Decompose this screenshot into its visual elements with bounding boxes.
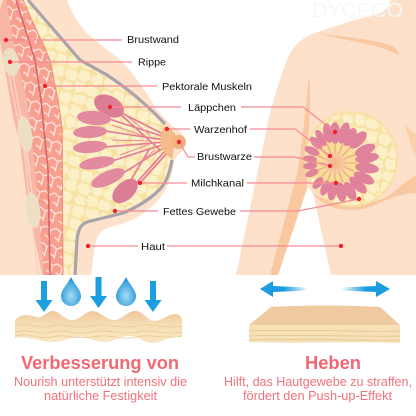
heading: lift: Heben: [305, 353, 361, 373]
fat circle: [305, 112, 397, 206]
breast crescent shadow: [312, 176, 416, 210]
milk ducts: [106, 113, 167, 184]
icon: drop: [61, 277, 81, 306]
anatomy labels: Fettes Gewebe: [163, 206, 236, 218]
callout dots: [4, 38, 361, 248]
icon: right arrow: [341, 281, 390, 297]
icon: firming arrows and drops: [36, 277, 162, 312]
icon: left arrow: [260, 281, 308, 297]
side contour: [405, 125, 416, 155]
panel: breast cross-section: [0, 0, 186, 275]
areola: [323, 151, 347, 175]
watermark: DYCECO: [312, 0, 403, 22]
anatomy labels: Brustwarze: [197, 151, 252, 163]
areola and nipple: [161, 126, 176, 160]
anatomy labels: Pektorale Muskeln: [162, 81, 252, 93]
collar shadow: [318, 33, 399, 55]
text: lift description: Hilft, das Hautgewebe zu straffen,: [224, 375, 412, 389]
anatomy labels: [127, 34, 252, 253]
grey membrane: [28, 0, 172, 275]
duct disc: [312, 140, 358, 186]
icon: arrow: [36, 281, 52, 312]
red divider: [16, 0, 50, 275]
skin: [0, 0, 186, 275]
inner arm shadow: [270, 75, 310, 275]
muscle fibres: [8, 70, 38, 275]
gland petals: [303, 121, 380, 203]
panel: front torso: [236, 0, 416, 275]
flat skin block: [249, 306, 400, 343]
callout lines: [6, 40, 359, 246]
text: firming description: [14, 375, 187, 403]
heading: firming: Verbesserung von: [21, 353, 179, 373]
text: firming description: natürliche Festigkeit: [44, 389, 158, 403]
text: lift description: fördert den Push-up-Effekt: [243, 389, 393, 403]
body: [236, 0, 416, 275]
anatomy labels: Brustwand: [127, 34, 179, 46]
anatomy labels: Haut: [141, 241, 165, 253]
pectoral muscle: [0, 0, 63, 275]
wavy skin layers: [15, 311, 182, 343]
anatomy labels: Rippe: [138, 56, 166, 68]
rib band inner: [17, 0, 63, 275]
text: firming description: Nourish unterstützt intensiv die: [14, 375, 187, 389]
icon: arrow: [90, 277, 107, 308]
lobules: [73, 94, 138, 204]
inner edge: [23, 0, 63, 275]
icon: drop: [116, 277, 136, 306]
anatomy labels: Milchkanal: [191, 178, 244, 190]
anatomy labels: Warzenhof: [194, 124, 247, 136]
text: lift description: [224, 375, 412, 403]
icon: arrow: [144, 281, 162, 312]
fat tissue: [23, 0, 172, 275]
rib band outer: [6, 0, 50, 275]
chest wall ovals: [3, 48, 40, 228]
milk ducts: [314, 142, 356, 184]
anatomy labels: Läppchen: [188, 102, 236, 114]
